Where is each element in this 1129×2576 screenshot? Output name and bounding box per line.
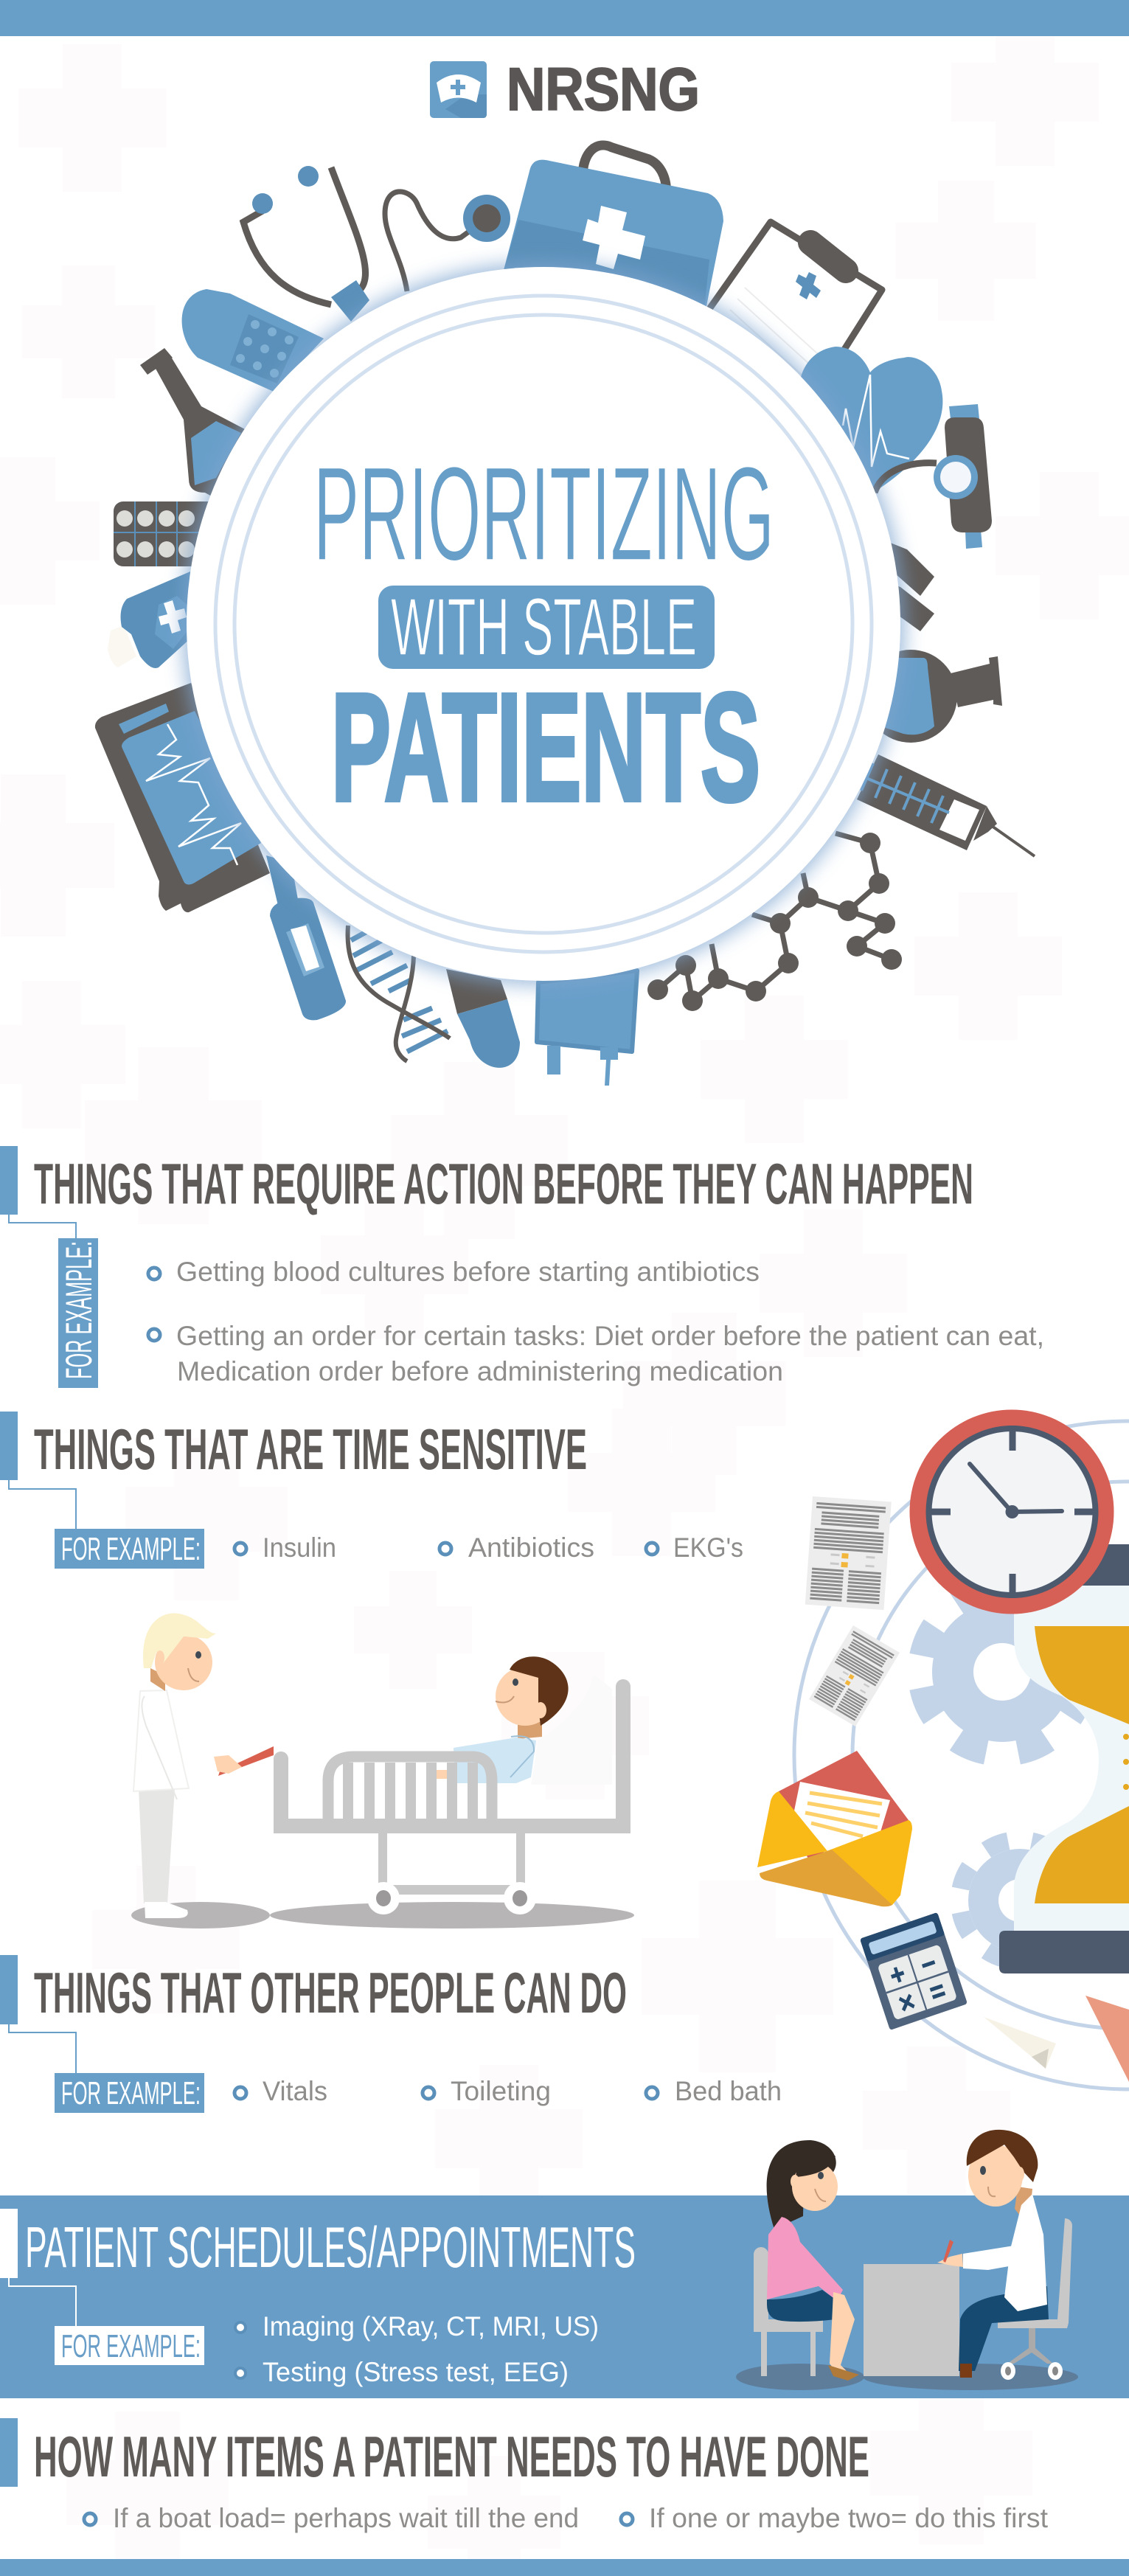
- icon: syringe: [857, 754, 1035, 856]
- icon: envelope: [757, 1751, 912, 1906]
- icon: medical bag: [503, 145, 723, 310]
- bottom bar: [0, 2559, 1129, 2576]
- icon: blood pressure device: [875, 404, 992, 549]
- section: other people can do: [0, 1955, 782, 2113]
- logo wordmark: NRSNG: [507, 56, 700, 123]
- heading: PATIENT SCHEDULES/APPOINTMENTS: [25, 2215, 636, 2280]
- section: things that require action: [0, 1146, 1044, 1388]
- for example label: FOR EXAMPLE:: [61, 2328, 201, 2364]
- bullet list: If one or maybe two= do this first: [649, 2503, 1049, 2533]
- logo: [430, 56, 700, 123]
- bullet list: [235, 2311, 599, 2387]
- title badge circle: [182, 263, 905, 985]
- bullet list: Toileting: [451, 2076, 551, 2106]
- for example label: [55, 1529, 204, 1569]
- for example label: FOR EXAMPLE:: [58, 1241, 100, 1379]
- illustration: medical icons ring: [95, 145, 1035, 1086]
- bullet list: Vitals: [263, 2076, 327, 2106]
- gears: [921, 1591, 1083, 1961]
- icon: test tube: [446, 969, 520, 1068]
- icon: pill blister: [114, 501, 224, 566]
- document one: [805, 1496, 892, 1610]
- icon: scalpel: [889, 542, 934, 631]
- icon: calculator: [860, 1912, 968, 2030]
- icon: round flask: [864, 650, 1002, 743]
- for example label: [58, 1238, 100, 1388]
- title: with stable pill: WITH STABLE: [391, 582, 697, 673]
- bullet list: Testing (Stress test, EEG): [263, 2357, 569, 2387]
- bullet list: [235, 1532, 743, 1563]
- panel: patient schedules band: [0, 2195, 1129, 2398]
- for example label: [55, 2326, 204, 2365]
- hourglass: [999, 1544, 1129, 1973]
- bullet list: Antibiotics: [468, 1532, 594, 1563]
- bullet list: Imaging (XRay, CT, MRI, US): [263, 2311, 599, 2341]
- icon: nurse cap: [430, 61, 487, 118]
- icon: IV bag: [537, 971, 637, 1086]
- section: time sensitive: [0, 1412, 743, 1569]
- doctor figure: [133, 1614, 274, 1918]
- section: how many items: [0, 2418, 1049, 2533]
- for example label: [55, 2073, 204, 2113]
- desk: [864, 2264, 959, 2376]
- bullet list: [84, 2503, 1049, 2533]
- bullet list: Getting blood cultures before starting antibiotics: [176, 1257, 760, 1287]
- bullet list: Getting an order for certain tasks: Diet order before the patient can eat,: [176, 1321, 1044, 1351]
- icon: monitor with ECG: [95, 683, 270, 912]
- icon: clock: [910, 1410, 1114, 1614]
- icon: blue bottle: [108, 572, 199, 668]
- floor shadows: [131, 1902, 634, 1928]
- for example label: FOR EXAMPLE:: [61, 2075, 201, 2111]
- bullet list: [235, 2076, 782, 2106]
- top bar: [0, 0, 1129, 36]
- patient figure: [435, 1656, 612, 1785]
- doctor figure: [937, 2130, 1072, 2380]
- bullet list: [148, 1257, 1044, 1386]
- icon: heart with ECG: [799, 347, 942, 494]
- illustration: doctor at patient bed: [131, 1614, 634, 1928]
- icon: clipboard: [693, 222, 882, 402]
- document two: [809, 1625, 900, 1726]
- for example label: FOR EXAMPLE:: [61, 1531, 201, 1567]
- icon: paper planes: [984, 1996, 1129, 2082]
- bullet list: Medication order before administering medication: [177, 1356, 783, 1386]
- icon: thermometer: [266, 855, 346, 1020]
- hospital bed: [274, 1679, 630, 1914]
- illustration: patient and doctor at desk: [736, 2130, 1078, 2390]
- bullet list: If a boat load= perhaps wait till the end: [113, 2503, 579, 2533]
- heading: THINGS THAT OTHER PEOPLE CAN DO: [34, 1960, 627, 2025]
- floor shadows: [736, 2364, 1078, 2390]
- patient woman figure: [754, 2140, 859, 2381]
- icon: molecule: [647, 833, 902, 1011]
- heading: THINGS THAT ARE TIME SENSITIVE: [34, 1417, 587, 1482]
- bullet list: Insulin: [263, 1532, 336, 1563]
- title: patients: PATIENTS: [331, 662, 760, 833]
- bullet list: Bed bath: [675, 2076, 782, 2106]
- illustration: time management: [757, 1410, 1129, 2089]
- icon: DNA: [348, 926, 450, 1061]
- bullet list: EKG's: [673, 1532, 743, 1563]
- icon: flask: [140, 348, 245, 501]
- title: with stable pill: [378, 582, 715, 673]
- icon: bandage: [182, 289, 324, 392]
- icon: stethoscope: [243, 166, 510, 322]
- background rings: [794, 1421, 1129, 2089]
